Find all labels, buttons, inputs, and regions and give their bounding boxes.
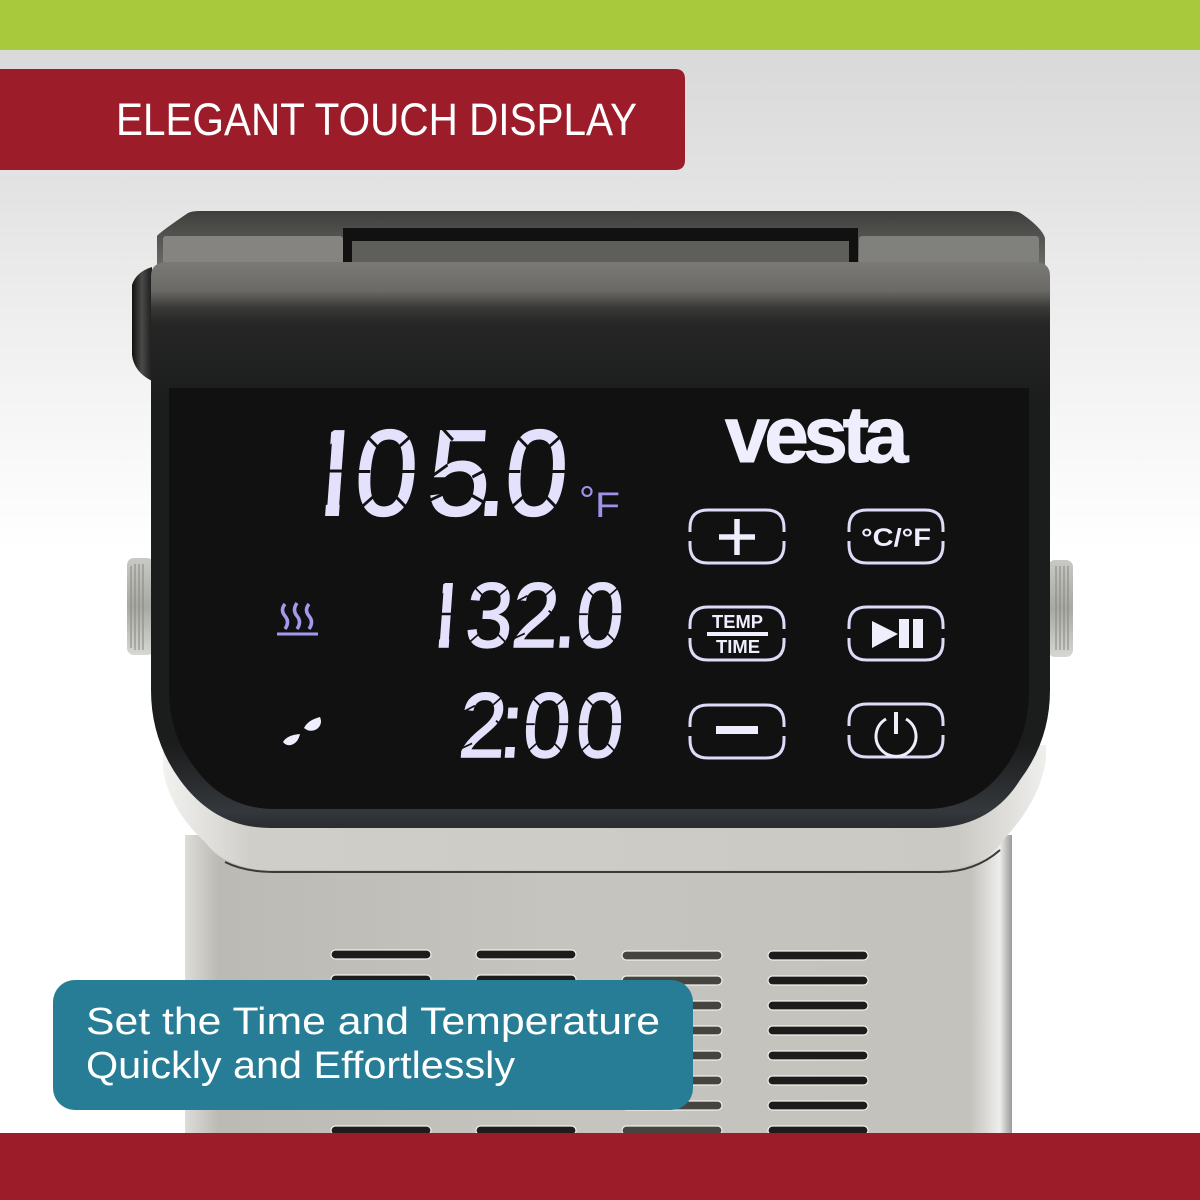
stainless steel body — [185, 835, 1012, 1135]
button: unit toggle: °C/°F — [861, 524, 931, 552]
bottom red bar — [0, 1133, 1200, 1200]
callout text: Quickly and Effortlessly — [86, 1045, 515, 1087]
side button — [132, 267, 152, 381]
icon: heat — [277, 603, 318, 634]
side knob right — [1048, 560, 1073, 657]
button: power — [849, 704, 943, 757]
logo: vesta — [725, 390, 909, 479]
unit — [579, 479, 620, 525]
button: unit toggle — [849, 510, 943, 563]
silver trim — [163, 745, 1046, 870]
current temperature: 105.0 — [298, 405, 573, 541]
side knob left — [127, 558, 154, 655]
vent slots — [331, 950, 868, 1135]
callout: set the time and temperature — [53, 980, 693, 1110]
button: minus — [690, 705, 784, 758]
button: play pause — [849, 607, 943, 660]
button: temp time: TIME — [716, 637, 760, 657]
banner: elegant touch display — [0, 69, 685, 170]
callout text: Set the Time and Temperature — [86, 1001, 660, 1043]
button: temp time: TEMP — [712, 612, 763, 632]
unit: F — [595, 486, 620, 525]
top hinge housing — [157, 211, 1045, 265]
device: sous vide circulator — [127, 211, 1073, 1135]
touch screen — [169, 388, 1029, 809]
button: temp time — [690, 607, 784, 660]
unit: ° — [579, 479, 595, 523]
target temperature: 132.0 — [417, 564, 627, 667]
green top bar — [0, 0, 1200, 50]
display readouts — [292, 405, 628, 777]
icon: water drops — [283, 717, 321, 745]
banner heading: ELEGANT TOUCH DISPLAY — [116, 95, 637, 145]
background gradient — [0, 50, 1200, 550]
timer: 2:00 — [456, 674, 627, 777]
control head — [151, 262, 1050, 828]
button: plus — [690, 510, 784, 563]
